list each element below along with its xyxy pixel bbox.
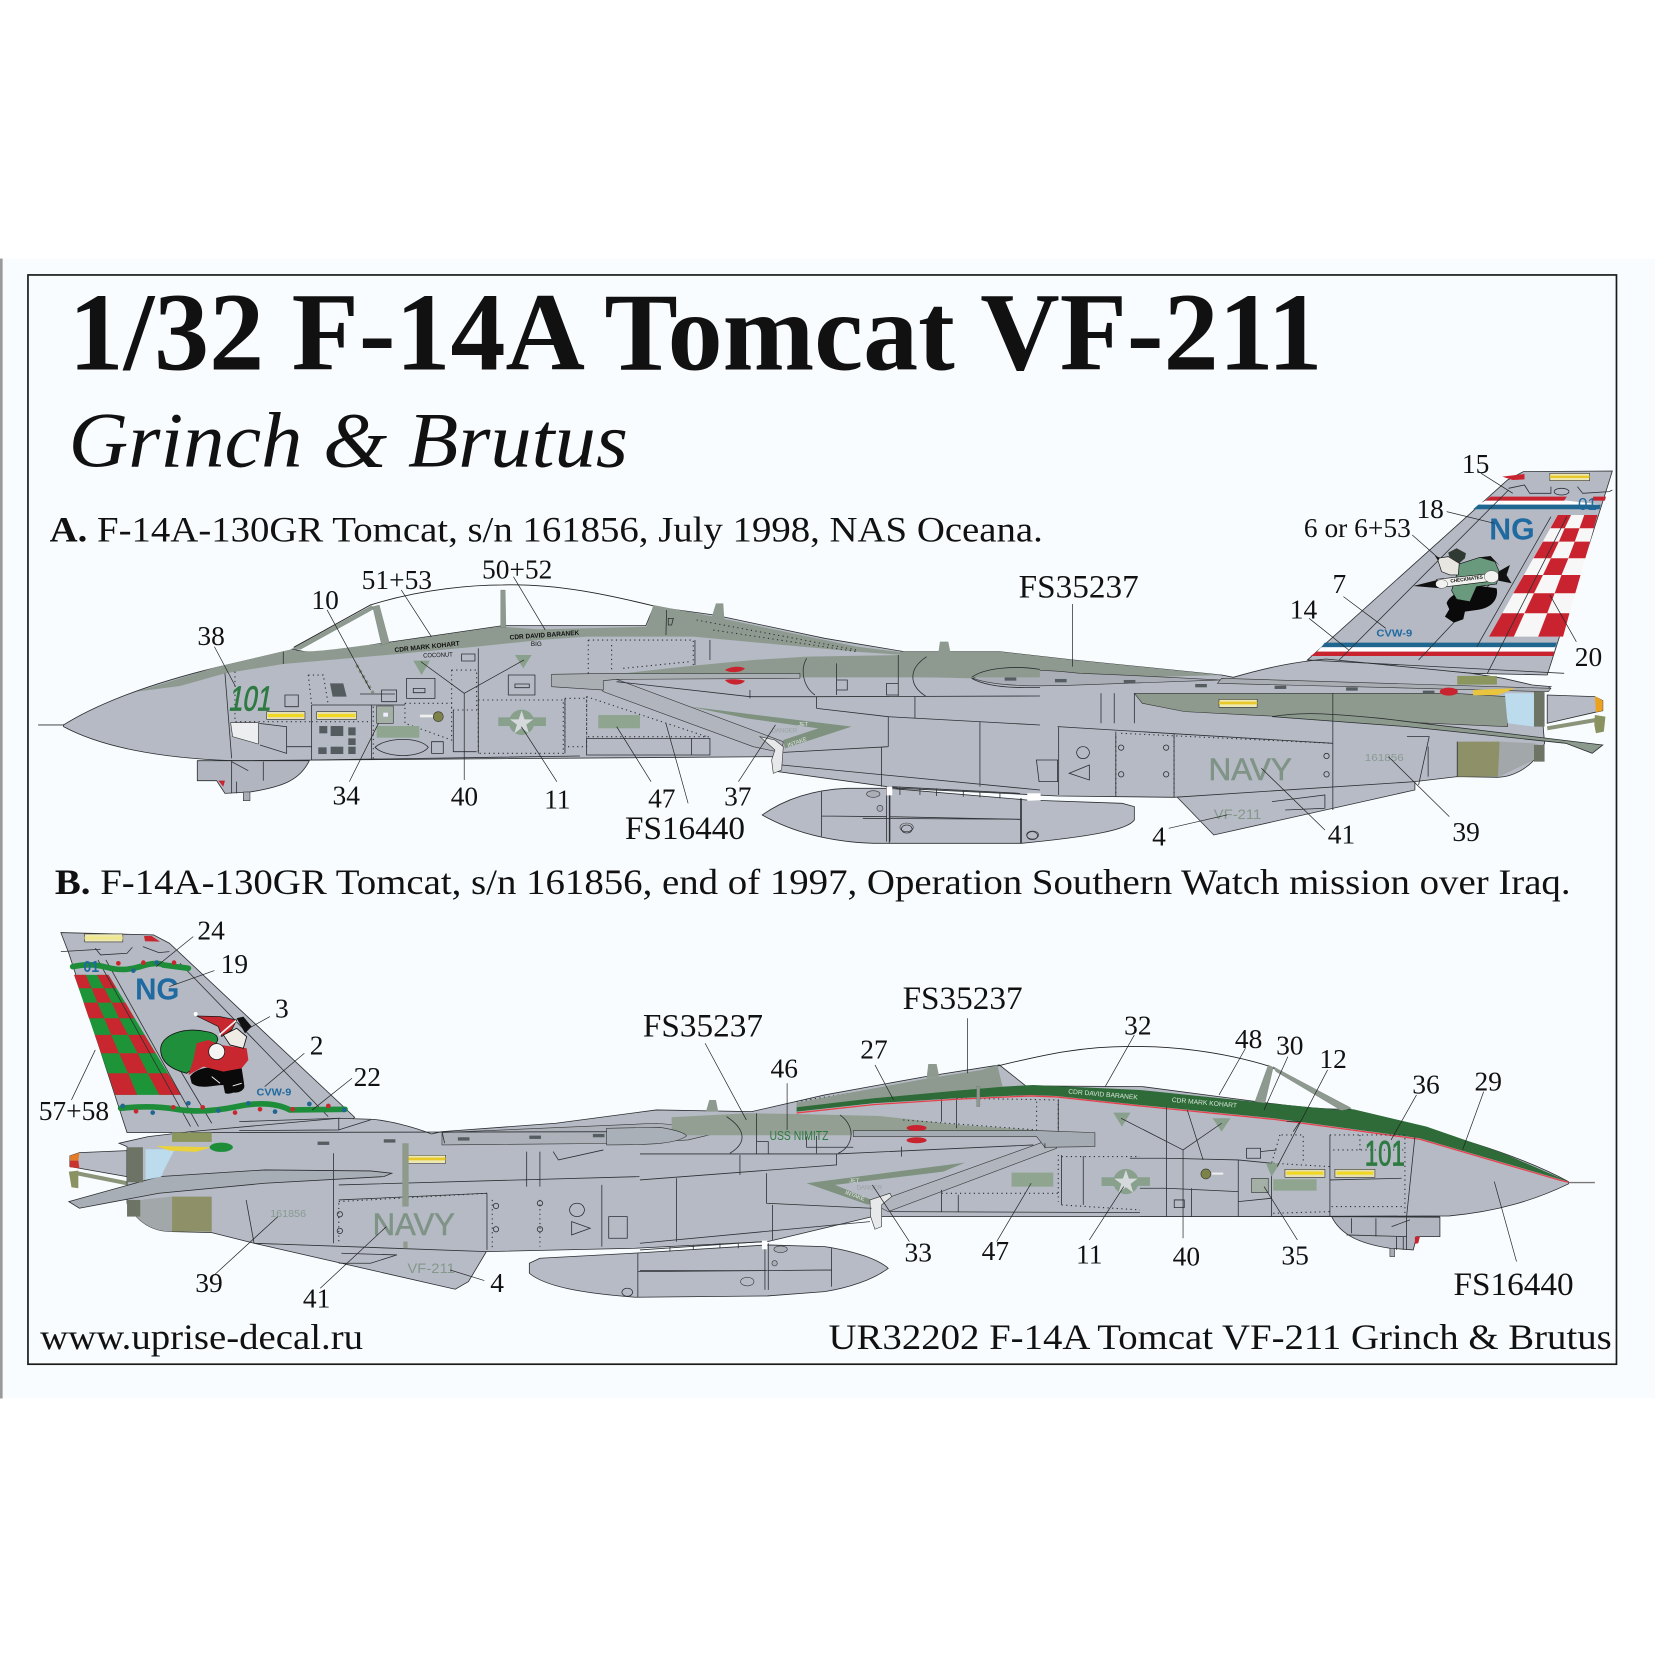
NAVY B: NAVY (373, 1206, 455, 1242)
callsign A2: BIG (531, 641, 542, 648)
canopy frames A (291, 590, 506, 649)
callout numbers B: 29 (1475, 1066, 1502, 1096)
canopy outline A (294, 585, 654, 647)
panel lines mid A (565, 610, 1040, 790)
pilot name B2: CDR MARK KOHART (1171, 1097, 1237, 1110)
dorsal olive band with canopy sill A (137, 605, 910, 692)
chevron lettering A: DANGER (772, 729, 798, 735)
callout numbers B: FS35237 (643, 1007, 763, 1044)
aircraft B forward detail (607, 1064, 1569, 1290)
callout numbers B: 33 (905, 1237, 932, 1267)
callout numbers B: 12 (1319, 1044, 1347, 1074)
callout numbers B: 19 (221, 949, 248, 979)
VF-211 B: VF-211 (407, 1261, 455, 1276)
chevron lettering B: INTAKE (844, 1190, 865, 1203)
tail cone and hook A (1547, 695, 1605, 733)
modex 01 B: 01 (83, 959, 99, 976)
callout numbers B: 35 (1281, 1240, 1309, 1270)
garland bottom B (120, 1101, 346, 1115)
callout numbers B: 47 (982, 1236, 1009, 1266)
callout numbers A: 4 (1152, 821, 1166, 851)
nose section B (977, 1065, 1440, 1257)
tank detail A (822, 787, 1041, 843)
aft dorsal olive A (900, 652, 1222, 678)
pilot name A1: CDR MARK KOHART (394, 640, 460, 654)
emblem Grinch B (161, 1012, 252, 1094)
callout numbers B: 48 (1235, 1024, 1262, 1054)
ventral fin B (254, 1243, 487, 1289)
glove bar A (552, 673, 800, 690)
exhaust nozzle upper B (127, 1133, 233, 1182)
tail code NG A: NG (1489, 512, 1535, 546)
chevron lettering A: JET (798, 722, 809, 728)
nose probe A (38, 724, 65, 726)
leader lines B (71, 937, 1517, 1288)
antenna mid A (712, 603, 951, 653)
checkerboard rudder A (1307, 485, 1612, 673)
callout numbers B: 36 (1412, 1069, 1440, 1099)
callout numbers A (197, 449, 1602, 851)
callout numbers A: 7 (1333, 569, 1346, 599)
markings text B (83, 959, 1405, 1276)
aircraft B: F-14A side view facing right (61, 933, 1595, 1297)
callout numbers A: 34 (332, 780, 360, 810)
glove bar B (853, 1131, 1095, 1147)
national insignia A (498, 710, 546, 735)
title: 1/32 F-14A Tomcat VF-211 (69, 270, 1323, 393)
swept wing B (69, 1170, 392, 1208)
callout numbers B: FS16440 (1454, 1266, 1574, 1303)
canopy frames B (977, 1065, 1352, 1111)
chevron lettering A: INTAKE (787, 737, 808, 749)
fin art B (73, 936, 346, 1115)
modex 101 A: 101 (227, 680, 276, 718)
leader lines A (214, 473, 1576, 830)
antennae B (706, 1064, 939, 1112)
callout numbers B: 27 (860, 1035, 888, 1065)
callout numbers A: 14 (1290, 595, 1318, 625)
serial A: 161856 (1365, 752, 1404, 764)
callout numbers B (39, 915, 1574, 1314)
panel lines mid B (640, 1077, 1140, 1243)
red pinstripe B (797, 1096, 1569, 1182)
canopy outline B (998, 1046, 1349, 1107)
intake lip white B (870, 1193, 892, 1229)
chevron lettering A (772, 722, 809, 749)
wing root olive wedge A (613, 653, 1040, 677)
chevrons cockpit A (413, 655, 532, 675)
nacelle and fin root panels B (191, 1118, 730, 1145)
subtitle: Grinch & Brutus (69, 397, 628, 484)
callout numbers B: 40 (1173, 1242, 1200, 1272)
callsign A1: COCONUT (423, 652, 453, 660)
callout numbers A: 10 (311, 585, 339, 615)
tail code NG B: NG (135, 973, 179, 1007)
chevron JET INTAKE A (690, 707, 852, 748)
callout numbers B: 30 (1276, 1030, 1304, 1060)
modex 01 A: 01 (1578, 494, 1597, 514)
aircraft A: F-14A side view facing left (38, 471, 1612, 843)
modex 101 B: 101 (1365, 1134, 1405, 1173)
callout numbers A: 47 (648, 783, 676, 813)
heading: profile B: B. F-14A-130GR Tomcat, s/n 161856, end of 1997, Operation Southern Watch mission over Iraq. (55, 862, 1571, 902)
nose probe B (1567, 1182, 1595, 1184)
emblem Brutus A: CHECKMATES (1450, 575, 1484, 585)
glove beam A (590, 677, 783, 753)
callout numbers B: FS35237 (903, 980, 1023, 1017)
aft inlet oval A (973, 670, 1222, 686)
inlet olive B (672, 1113, 1037, 1135)
stencils aft B (85, 934, 446, 1248)
chevron lettering B: JET (849, 1179, 860, 1185)
tail cone and hook B (69, 1151, 127, 1188)
chevron lettering B (844, 1179, 883, 1203)
exhaust nozzle lower A (1457, 742, 1545, 777)
tank detail B (640, 1241, 832, 1290)
access stencils B (1201, 1169, 1375, 1193)
inlet oval B (607, 1127, 687, 1145)
chevron JET INTAKE B (807, 1163, 965, 1205)
callout numbers B: 22 (354, 1062, 381, 1092)
glove beam B (870, 1137, 1058, 1212)
aft panel lines A (863, 693, 1457, 843)
national insignia B (1102, 1169, 1150, 1194)
NAVY A: NAVY (1209, 751, 1292, 787)
callout numbers A: 20 (1575, 642, 1602, 672)
nose gear fairing B (1332, 1217, 1440, 1257)
callout numbers A: 6 or 6+53 (1304, 513, 1411, 543)
stencil 47 B (1012, 1173, 1053, 1187)
CVW-9 A: CVW-9 (1376, 627, 1412, 639)
yellow stencils aft A (1219, 473, 1590, 707)
green anti-glare band B (797, 1085, 1569, 1182)
callout numbers B: 39 (195, 1268, 223, 1298)
drop tank B (529, 1245, 888, 1297)
aircraft A forward detail (137, 590, 1041, 843)
aft panel lines B (246, 1150, 768, 1297)
callout numbers A: 18 (1416, 494, 1444, 524)
red fin cap B (144, 936, 160, 942)
USS NIMITZ B: USS NIMITZ (769, 1129, 829, 1143)
exhaust nozzle upper A (1440, 676, 1545, 727)
callout numbers B: 2 (310, 1030, 324, 1060)
vent grid A (318, 683, 356, 754)
callout numbers A: FS16440 (625, 810, 745, 847)
callout numbers A: 41 (1328, 819, 1355, 849)
nose gear fairing A (197, 760, 309, 801)
callout numbers B: 32 (1124, 1010, 1152, 1040)
CVW-9 B: CVW-9 (256, 1087, 291, 1099)
main fuselage A (64, 607, 1551, 797)
pilot name A2: CDR DAVID BARANEK (509, 630, 580, 642)
garland top B (73, 960, 188, 973)
callout numbers A: 15 (1462, 449, 1489, 479)
callout numbers B: 57+58 (39, 1096, 109, 1126)
stencil 47 A (598, 715, 640, 728)
intake lip white A (760, 737, 783, 773)
panel lines nose section B (1130, 1107, 1440, 1217)
dorsal olive spine B (797, 1065, 1003, 1108)
markings text A (227, 494, 1597, 822)
pilot name B1: CDR DAVID BARANEK (1068, 1089, 1139, 1102)
engine dark area A (1134, 693, 1508, 727)
vertical fin B (61, 933, 355, 1133)
swept wing A (1272, 714, 1603, 753)
mid section A (552, 603, 1041, 843)
emblem Brutus A (1413, 548, 1512, 623)
exhaust nozzle lower B (127, 1197, 212, 1232)
heading: profile A: A. F-14A-130GR Tomcat, s/n 161856, July 1998, NAS Oceana. (50, 509, 1043, 549)
callout numbers A: FS35237 (1019, 568, 1139, 605)
callout numbers B: 41 (303, 1284, 330, 1314)
callout numbers B: 46 (771, 1054, 798, 1084)
panel lines nose section A (225, 648, 580, 760)
chevron lettering B: DANGER (857, 1185, 883, 1191)
red warnings B (907, 1125, 927, 1143)
callout numbers B: 3 (275, 993, 289, 1023)
callout numbers A: 40 (451, 781, 478, 811)
callout numbers B: 24 (197, 915, 225, 945)
fin stripes A (1311, 474, 1606, 656)
callout numbers A: 39 (1452, 817, 1480, 847)
callout numbers B: 11 (1076, 1239, 1102, 1269)
callout numbers A: 37 (724, 781, 752, 811)
red warnings A (725, 667, 745, 685)
callout numbers A: 51+53 (362, 565, 432, 595)
website footer: www.uprise-decal.ru (40, 1317, 363, 1357)
access stencils A (231, 665, 443, 744)
chevrons cockpit B (1113, 1113, 1280, 1177)
main fuselage B (119, 1065, 1568, 1252)
VF-211 A: VF-211 (1214, 807, 1261, 822)
drop tank A (762, 788, 1134, 843)
callout numbers A: 11 (544, 785, 571, 815)
vertical fin A (1307, 471, 1612, 675)
callout numbers A: 50+52 (482, 554, 552, 584)
ventral fin A (1177, 780, 1415, 835)
product code footer: UR32202 F-14A Tomcat VF-211 Grinch & Brutus (829, 1317, 1612, 1357)
callout numbers B: 4 (490, 1268, 504, 1298)
callout numbers A: 38 (197, 621, 225, 651)
serial B: 161856 (270, 1208, 306, 1220)
nacelle top strip A (1005, 677, 1551, 694)
checkerboard rudder B (61, 947, 328, 1127)
